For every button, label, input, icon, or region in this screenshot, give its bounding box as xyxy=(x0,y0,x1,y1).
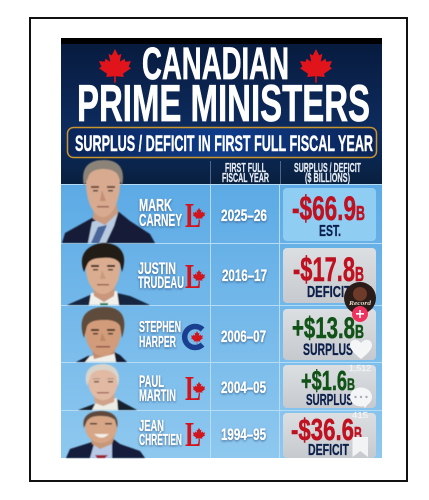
name: STEPHEN xyxy=(139,319,181,336)
value card: DEFICIT xyxy=(308,442,349,459)
row: Justin Trudeau xyxy=(67,243,376,305)
icon: avatar: Record xyxy=(348,301,372,307)
column heading: surplus or deficit: SURPLUS / DEFICIT xyxy=(294,161,361,175)
column heading: surplus or deficit xyxy=(294,161,361,185)
name xyxy=(138,260,184,292)
name xyxy=(139,373,176,405)
portrait: Paul Martin xyxy=(78,364,137,410)
icon: bookmark xyxy=(352,437,368,457)
overlay: social action buttons xyxy=(344,282,376,457)
name xyxy=(139,418,182,449)
like count: 1,512 xyxy=(349,363,371,373)
icon: Liberal logo: L xyxy=(185,196,201,235)
name: PAUL xyxy=(139,373,164,391)
value card xyxy=(283,412,376,459)
name: TRUDEAU xyxy=(138,274,184,292)
value card xyxy=(283,365,376,409)
value card: B xyxy=(355,322,364,342)
value card: B xyxy=(347,375,355,394)
icon: comment bubble xyxy=(350,388,372,408)
name: CHRÉTIEN xyxy=(139,430,182,449)
name xyxy=(139,319,181,351)
icon: right maple leaf xyxy=(300,49,332,83)
column heading: fiscal year: FISCAL YEAR xyxy=(222,171,269,185)
fiscal year: 2004–05 xyxy=(221,378,266,397)
name: HARPER xyxy=(139,334,176,351)
value card: DEFICIT xyxy=(307,284,351,301)
value card: -$36.6 xyxy=(291,412,354,447)
icon: left maple leaf xyxy=(99,49,131,83)
value card: EST. xyxy=(319,223,341,240)
comment count: 415 xyxy=(352,410,368,420)
portrait: Stephen Harper xyxy=(76,307,127,362)
column heading: surplus or deficit: ($ BILLIONS) xyxy=(305,171,350,185)
name: MARTIN xyxy=(139,387,176,405)
fiscal year: 2016–17 xyxy=(222,266,267,285)
icon: Liberal logo: L xyxy=(185,257,201,296)
icon: heart xyxy=(350,340,372,359)
icon: Conservative logo xyxy=(185,326,203,348)
name: MARK xyxy=(139,195,172,215)
panel: header xyxy=(61,38,382,185)
value card: +$13.8 xyxy=(292,312,355,345)
value card: B xyxy=(355,264,364,286)
value card: B xyxy=(354,424,362,444)
portrait: Justin Trudeau xyxy=(67,243,150,305)
name: JUSTIN xyxy=(138,260,176,278)
column heading: fiscal year: FIRST FULL xyxy=(225,161,266,175)
column heading: fiscal year xyxy=(222,161,269,185)
row: Mark Carney xyxy=(62,160,376,243)
value card: SURPLUS xyxy=(306,392,353,409)
icon: avatar xyxy=(344,282,376,314)
portrait: Jean Chretien xyxy=(66,411,145,458)
icon: Liberal logo: L xyxy=(185,415,201,454)
icon: Liberal logo: L xyxy=(185,369,201,408)
value card xyxy=(283,248,376,303)
row: Stephen Harper xyxy=(76,307,376,362)
value card xyxy=(283,309,376,360)
value card: +$1.6 xyxy=(301,365,347,396)
icon: follow plus xyxy=(352,306,368,322)
value card: -$66.9 xyxy=(292,190,356,228)
row: Jean Chretien xyxy=(66,411,376,459)
value card: -$17.8 xyxy=(293,251,355,289)
value card: SURPLUS xyxy=(303,341,353,359)
title xyxy=(77,38,370,133)
fiscal year: 1994–95 xyxy=(221,425,266,444)
name xyxy=(139,195,182,230)
title: CANADIAN xyxy=(142,38,289,89)
value card: B xyxy=(356,203,365,225)
value card xyxy=(283,188,376,241)
fiscal year: 2025–26 xyxy=(221,206,267,225)
portrait: Mark Carney xyxy=(62,160,155,243)
table background xyxy=(61,184,382,458)
fiscal year: 2006–07 xyxy=(221,327,266,346)
name: JEAN xyxy=(139,418,164,435)
row: Paul Martin xyxy=(78,364,376,410)
name: CARNEY xyxy=(139,210,182,230)
